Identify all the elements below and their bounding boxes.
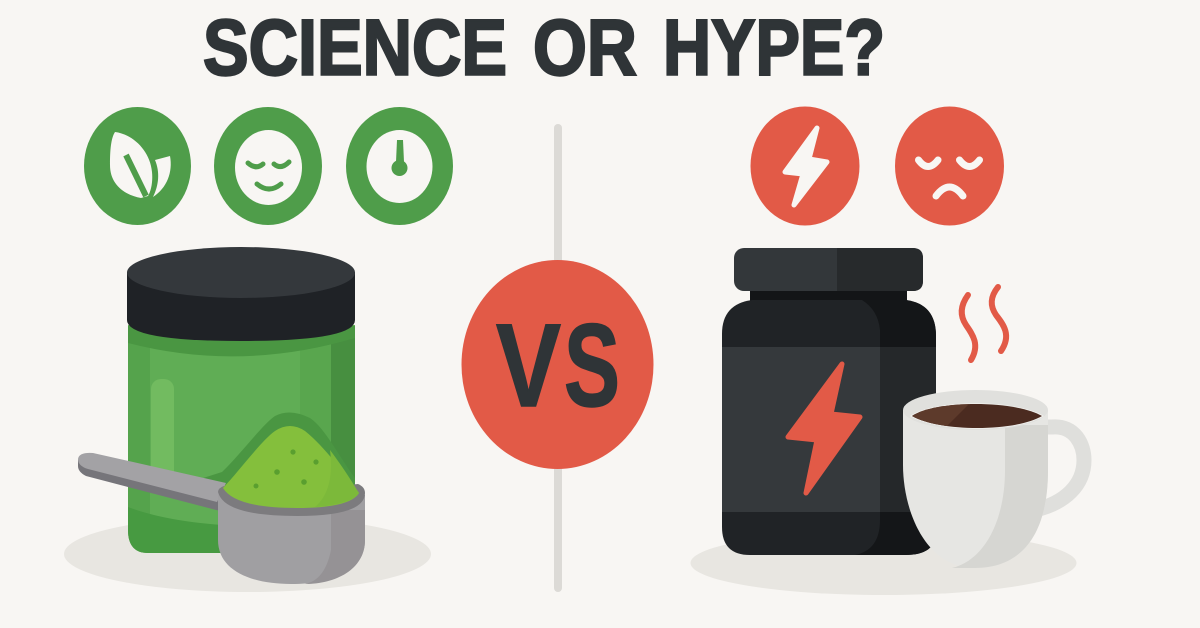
mug body [903, 410, 1048, 568]
icon: energy bolt [750, 106, 860, 226]
title [203, 2, 885, 92]
title: HYPE? [663, 2, 885, 92]
coffee mug [903, 390, 1084, 568]
bottle shadow [690, 531, 1076, 595]
steam [962, 287, 1006, 360]
icon: gauge [346, 107, 453, 225]
jar body [128, 325, 355, 553]
green powder [223, 426, 359, 508]
icon: calm face [214, 107, 322, 225]
VS badge [462, 260, 654, 469]
icon: sad face [895, 106, 1004, 226]
bottle body [722, 300, 936, 555]
VS badge: S [564, 300, 620, 432]
green jar with scoop [64, 247, 431, 592]
title: SCIENCE [203, 2, 507, 92]
scoop cup [218, 484, 365, 584]
bottle lid [734, 248, 923, 291]
coffee [910, 403, 1044, 429]
scoop handle [78, 453, 226, 511]
jar lid [127, 247, 355, 341]
center divider [554, 124, 562, 592]
title: OR [533, 2, 637, 92]
icon: leaves [84, 107, 191, 225]
bottle neck [750, 288, 907, 302]
mug handle [1035, 427, 1084, 510]
black supplement bottle [690, 248, 1076, 595]
jar shadow [64, 516, 431, 592]
bottle bolt [788, 364, 860, 493]
VS badge: V [496, 300, 561, 432]
